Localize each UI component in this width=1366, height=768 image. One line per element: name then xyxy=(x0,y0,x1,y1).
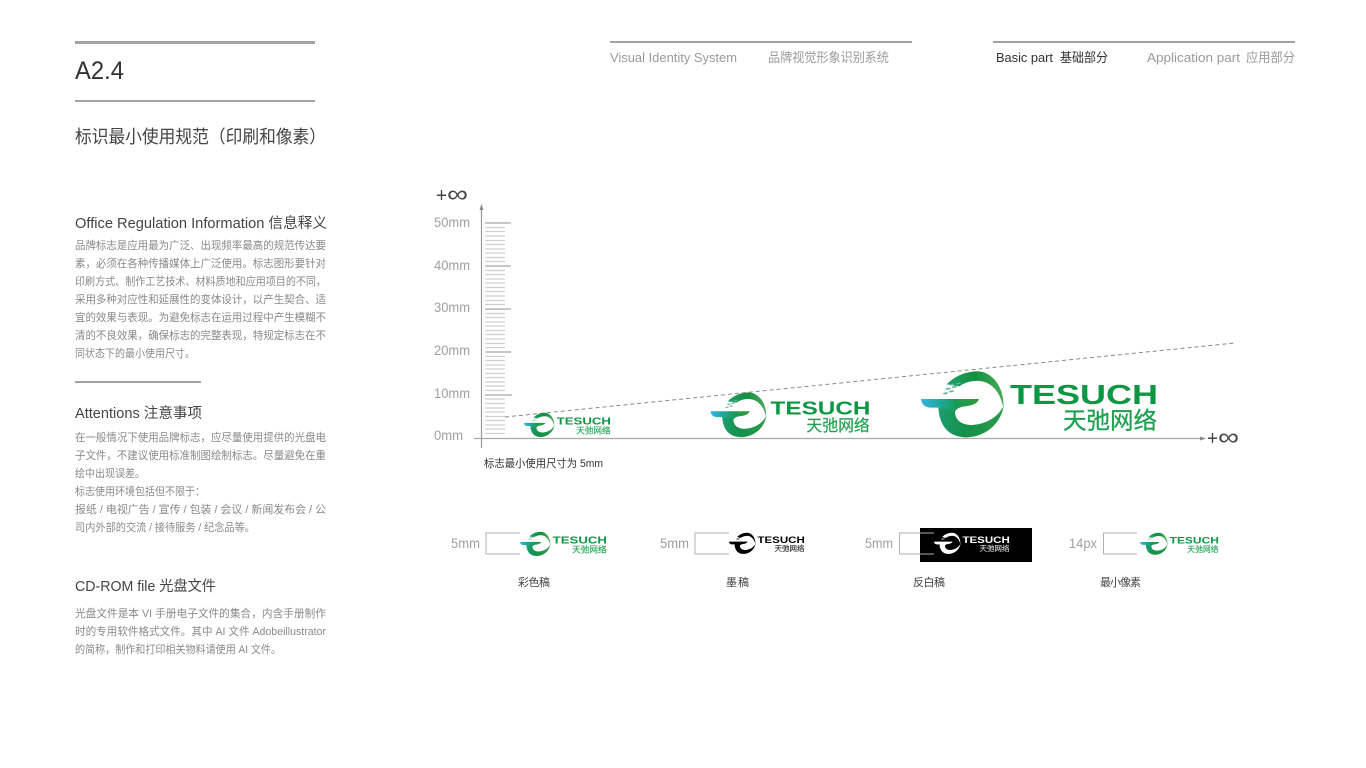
text block: information body: 品牌标志是应用最为广泛、出现频率最高的规范传达要 xyxy=(75,238,326,252)
heading: cd-rom: CD-ROM file 光盘文件 xyxy=(75,577,216,595)
axis labels: 10mm xyxy=(434,385,470,401)
text block: attentions body: 标志使用环境包括但不限于： xyxy=(75,484,205,498)
logo white: 天弛网络 xyxy=(979,543,1010,553)
panel: minimum pixels: 14px xyxy=(1069,535,1097,551)
text block: cd-rom body: 的简称，制作和打印相关物料请使用 AI 文件。 xyxy=(75,642,281,656)
ruler ticks xyxy=(485,228,505,434)
header navigation: parts: 基础部分 xyxy=(1060,50,1108,65)
logo minimum pixels xyxy=(1140,533,1219,555)
panel: reversed version: 反白稿 xyxy=(913,575,945,589)
panel: reversed version xyxy=(865,528,1032,589)
header navigation: parts: 应用部分 xyxy=(1246,50,1295,65)
infinity label horizontal: ∞ xyxy=(1218,424,1239,451)
logo large: TESUCH xyxy=(1010,379,1158,410)
panel: colour version xyxy=(451,532,607,589)
panel: black version: 5mm xyxy=(660,535,689,551)
heading: attentions: Attentions 注意事项 xyxy=(75,404,202,422)
horizontal axis xyxy=(474,436,1206,440)
panel: black version xyxy=(660,533,805,589)
infinity label vertical: ∞ xyxy=(447,181,468,208)
infinity label vertical: + xyxy=(436,185,447,207)
logo medium: 天弛网络 xyxy=(806,416,870,435)
panel: attentions xyxy=(75,404,326,534)
logo white: TESUCH xyxy=(962,535,1010,545)
text block: cd-rom body xyxy=(75,606,326,656)
heading: information: Office Regulation Information 信息释义 xyxy=(75,215,327,232)
text block: information body: 宜的效果与表现。为避免标志在运用过程中产生模糊不 xyxy=(75,310,326,324)
header navigation: parts: Application part xyxy=(1147,50,1240,65)
logo colour: 天弛网络 xyxy=(572,544,607,555)
logo black xyxy=(729,533,805,554)
panel: black version: 墨稿 xyxy=(726,575,749,589)
header navigation: visual identity system: Visual Identity System xyxy=(610,50,737,65)
axis labels: 20mm xyxy=(434,342,470,358)
text block: information body: 印刷方式、制作工艺技术、材料质地和应用项目的不同， xyxy=(75,274,326,288)
logo minimum pixels: 天弛网络 xyxy=(1187,544,1219,554)
text block: attentions body: 在一般情况下使用品牌标志，应尽量使用提供的光盘电 xyxy=(75,430,326,444)
text block: attentions body xyxy=(75,430,326,534)
vertical axis xyxy=(480,204,484,448)
text block: attentions body: 子文件，不建议使用标准制图绘制标志。尽量避免在重 xyxy=(75,448,326,462)
header navigation: visual identity system: 品牌视觉形象识别系统 xyxy=(768,50,889,65)
text block: information body xyxy=(75,238,326,360)
axis labels: 50mm xyxy=(434,214,470,230)
infinity label vertical xyxy=(436,181,468,208)
header navigation: visual identity system xyxy=(610,41,912,65)
infinity label horizontal xyxy=(1207,424,1239,451)
logo small xyxy=(524,413,611,437)
logo large: 天弛网络 xyxy=(1063,408,1157,434)
panel: colour version: 彩色稿 xyxy=(518,575,550,589)
axis labels: 40mm xyxy=(434,257,470,273)
text block: information body: 同状态下的最小使用尺寸。 xyxy=(75,346,195,360)
title: 标识最小使用规范（印刷和像素） xyxy=(75,127,326,147)
text block: attentions body: 报纸 / 电视广告 / 宣传 / 包装 / 会议 / 新闻发布会 / 公 xyxy=(75,502,326,516)
infinity label horizontal: + xyxy=(1207,428,1218,450)
panel: cd-rom file xyxy=(75,577,326,656)
axis labels: 30mm xyxy=(434,299,470,315)
logo large xyxy=(921,371,1158,437)
chart: logo size scale xyxy=(434,181,1239,470)
dashed growth line xyxy=(505,343,1235,417)
axis labels: 0mm xyxy=(434,427,463,443)
text block: cd-rom body: 光盘文件是本 VI 手册电子文件的集合，内含手册制作 xyxy=(75,606,326,620)
text block: information body: 采用多种对应性和延展性的变体设计，以产生契合、适 xyxy=(75,292,326,306)
logo colour: TESUCH xyxy=(553,536,607,547)
logo colour xyxy=(520,532,607,556)
panel: colour version: 5mm xyxy=(451,535,480,551)
panel: reversed version: 5mm xyxy=(865,535,893,551)
header navigation: parts: Basic part xyxy=(996,50,1053,65)
axis labels xyxy=(434,214,470,443)
chart caption: 标志最小使用尺寸为 5mm xyxy=(484,456,603,470)
header navigation: parts xyxy=(993,41,1295,65)
logo medium: TESUCH xyxy=(771,399,870,420)
text block: attentions body: 绘中出现误差。 xyxy=(75,466,145,480)
header rule and section number xyxy=(75,41,315,102)
text block: cd-rom body: 时的专用软件格式文件。其中 AI 文件 Adobeillustrator xyxy=(75,624,326,638)
logo small: TESUCH xyxy=(557,417,611,428)
logo black: TESUCH xyxy=(757,535,805,545)
text block: information body: 清的不良效果，确保标志的完整表现，特规定标志在不 xyxy=(75,328,326,342)
panel: minimum pixels: 最小像素 xyxy=(1100,576,1141,589)
panel: minimum pixels xyxy=(1069,533,1219,589)
text block: attentions body: 司内外部的交流 / 接待服务 / 纪念品等。 xyxy=(75,520,255,534)
logo small: 天弛网络 xyxy=(576,425,611,436)
logo black: 天弛网络 xyxy=(774,543,805,553)
text block: information body: 素，必须在各种传播媒体上广泛使用。标志图形要针对 xyxy=(75,256,326,270)
logo medium xyxy=(710,393,870,437)
panel: office regulation information xyxy=(75,215,327,360)
header rule and section number: A2.4 xyxy=(75,57,124,85)
logo minimum pixels: TESUCH xyxy=(1170,536,1219,546)
logo white xyxy=(934,533,1010,554)
